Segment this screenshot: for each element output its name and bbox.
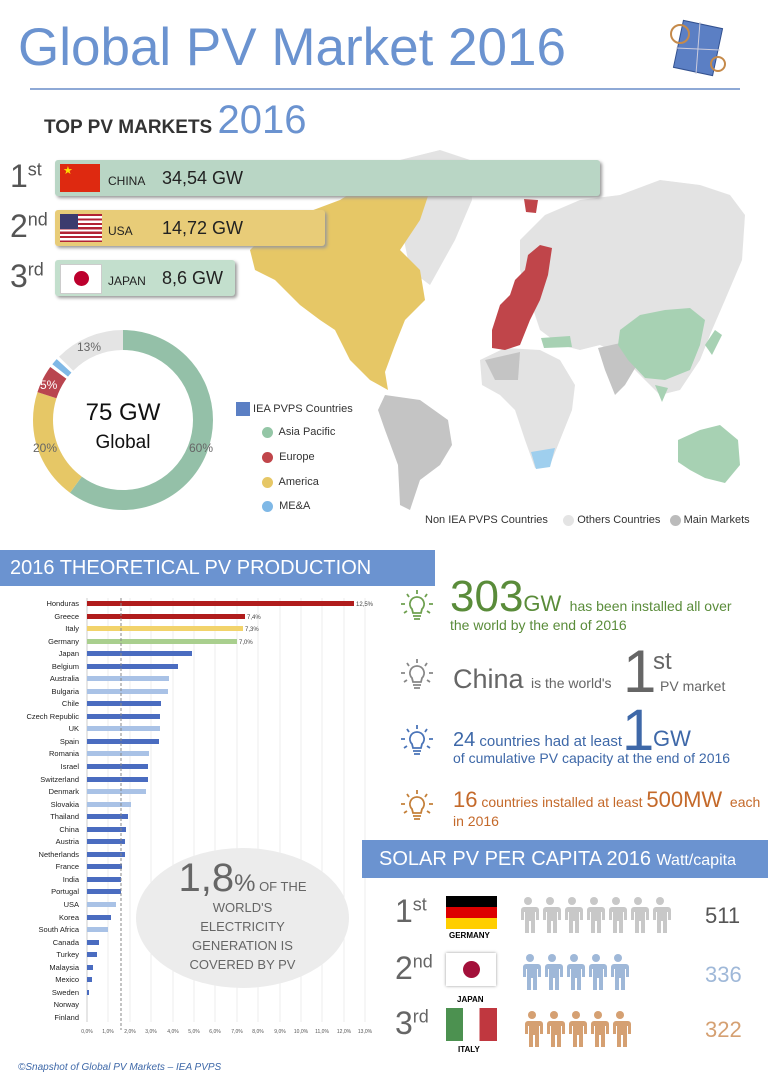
bar chart: Thailand [50,812,79,821]
heading: top pv markets: TOP PV MARKETS 2016 [44,98,306,142]
rank: china [10,158,604,200]
callout: 1.8%: COVERED BY PV [190,957,295,972]
rank: usa: 14,72 GW [162,218,243,238]
bar chart: 9,0% [274,1029,286,1035]
bar chart: 5,0% [188,1029,200,1035]
bar chart: 7,0% [239,640,253,646]
india [598,342,640,395]
map [250,150,745,510]
legend: Europe [279,451,315,463]
bar chart: 7,3% [245,627,259,633]
bar chart: 7,0% [231,1029,243,1035]
icon: bulb [401,725,433,755]
bar chart: 3,0% [145,1029,157,1035]
callout: 1.8%: 1,8% OF THE [178,856,306,900]
greenland [400,150,472,285]
rank: japan: 8,6 GW [162,268,223,288]
per capita: italy [395,1005,742,1054]
per capita: germany [395,893,740,940]
fact: 24 countries: GW [653,726,691,751]
rank: china: 34,54 GW [162,168,243,188]
per capita: germany: GERMANY [449,931,490,940]
bar chart: China [59,825,80,834]
bar chart: 4,0% [167,1029,179,1035]
per capita: japan: 336 [705,962,742,987]
rank: china: CHINA [108,174,145,188]
fact: 24 countries: 24 countries had at least [453,729,622,751]
fact: 24 countries: 1 [622,698,654,763]
bar chart: UK [69,724,79,733]
bar chart: Romania [49,749,80,758]
legend: America [278,476,319,488]
icon: people [523,954,629,990]
fact: china 1st: PV market [660,678,725,694]
europe [492,245,552,350]
per capita: japan [395,950,742,1004]
bar chart: France [56,862,79,871]
bar chart: Honduras [46,599,79,608]
icon: people [521,897,671,933]
bar chart: 0,0% [81,1029,93,1035]
bar chart: Denmark [49,787,79,796]
donut chart: 60% [189,441,213,455]
map legend: Non IEA PVPS Countries Others Countries Main Markets [425,514,750,526]
fact: 303GW [401,572,732,633]
footer: ©Snapshot of Global PV Markets – IEA PVPS [18,1062,221,1073]
header: theoretical production [0,550,435,586]
icon: bulb [401,790,433,820]
africa [480,348,575,468]
per capita: italy: 3rd [395,1005,429,1041]
asia/russia [520,180,745,395]
fact: china 1st [401,638,726,705]
bar chart: Italy [65,624,79,633]
rank: china: ★ [63,165,73,177]
rank: usa: USA [108,224,133,238]
bar chart: 1,0% [102,1029,114,1035]
bar chart: 2,0% [124,1029,136,1035]
bar chart: Czech Republic [26,712,79,721]
bar chart: Netherlands [39,850,79,859]
fact: china 1st: st [653,648,672,675]
bar chart: USA [64,900,79,909]
header: per capita: SOLAR PV PER CAPITA 2016 Watt/capita [379,848,736,870]
donut chart: 13% [77,340,101,354]
bar chart: Spain [60,737,79,746]
donut chart: 20% [33,441,57,455]
bar chart: 7,4% [247,615,261,621]
icon: solar panel logo [670,20,726,76]
bar chart: Norway [54,1000,79,1009]
bar chart: Switzerland [40,775,79,784]
bar chart: South Africa [39,925,80,934]
bar chart: Portugal [51,887,79,896]
bar chart: Korea [59,913,80,922]
donut chart [33,330,213,510]
fact: 24 countries: of cumulative PV capacity at the end of 2016 [453,750,730,766]
icon: bulb [401,590,433,620]
bar chart: Mexico [55,975,79,984]
bar chart: Bulgaria [51,687,80,696]
bar chart: Greece [54,612,79,621]
bar chart: 8,0% [252,1029,264,1035]
bar chart: Israel [61,762,79,771]
legend: ME&A [279,500,310,512]
bar chart: Germany [48,637,79,646]
bar chart: 6,0% [209,1029,221,1035]
legend: IEA PVPS Countries [253,403,353,415]
header: theoretical production: 2016 THEORETICAL PV PRODUCTION [10,557,371,579]
rank: china: 1st [10,158,42,194]
donut chart: 5% [40,378,58,392]
china [618,308,705,380]
per capita: germany: 511 [705,903,740,928]
donut chart: Global [96,432,150,453]
bar chart: 11,0% [315,1029,329,1035]
icon: bulb [401,659,433,689]
turkey [541,336,572,348]
callout: 1.8% [136,848,349,988]
fact: 16 countries: in 2016 [453,813,499,829]
rank: japan: 3rd [10,258,44,294]
rank: usa: 2nd [10,208,48,244]
bar chart [26,598,374,1035]
rank: japan: JAPAN [108,274,146,288]
fact: 16 countries [401,787,760,829]
fact: china 1st: 1 [623,638,656,705]
fact: 16 countries: 16 countries installed at least 500MW each [453,787,760,812]
bar chart: India [63,875,80,884]
bar chart: Turkey [56,950,79,959]
fact: 24 countries [401,698,730,766]
per capita: germany: 1st [395,893,427,929]
legend [236,402,353,512]
callout: 1.8%: ELECTRICITY [200,919,285,934]
bar chart: Chile [62,699,79,708]
bar chart: Australia [50,674,80,683]
bar chart: Belgium [52,662,79,671]
legend: Asia Pacific [278,426,335,438]
per capita: japan: 2nd [395,950,433,986]
bar chart: 12,0% [337,1029,352,1035]
bar chart: 12,5% [356,602,374,608]
fact: china 1st: China is the world's [453,664,612,694]
bar chart: Sweden [52,988,79,997]
fact: 303GW: the world by the end of 2016 [450,617,627,633]
bar chart: 13,0% [358,1029,373,1035]
per capita: japan: JAPAN [457,995,484,1004]
fact: 303GW: 303GW has been installed all over [450,572,732,621]
bar chart: Japan [59,649,79,658]
rank: japan [10,258,239,300]
south america [378,395,452,510]
bar chart: 10,0% [294,1029,309,1035]
rank: usa [10,208,329,250]
per capita: italy: ITALY [458,1045,480,1054]
north america [250,165,430,390]
bar chart: Austria [56,837,80,846]
icon: people [525,1011,631,1047]
bar chart: Malaysia [49,963,80,972]
header: per capita [362,840,768,878]
bar chart: Slovakia [51,800,80,809]
title: Global PV Market 2016 [18,18,566,77]
bar chart: Finland [54,1013,79,1022]
donut chart: 75 GW [86,399,161,426]
per capita: italy: 322 [705,1017,742,1042]
australia [678,425,740,483]
bar chart: Canada [53,938,80,947]
callout: 1.8%: GENERATION IS [192,938,293,953]
callout: 1.8%: WORLD'S [213,900,272,915]
